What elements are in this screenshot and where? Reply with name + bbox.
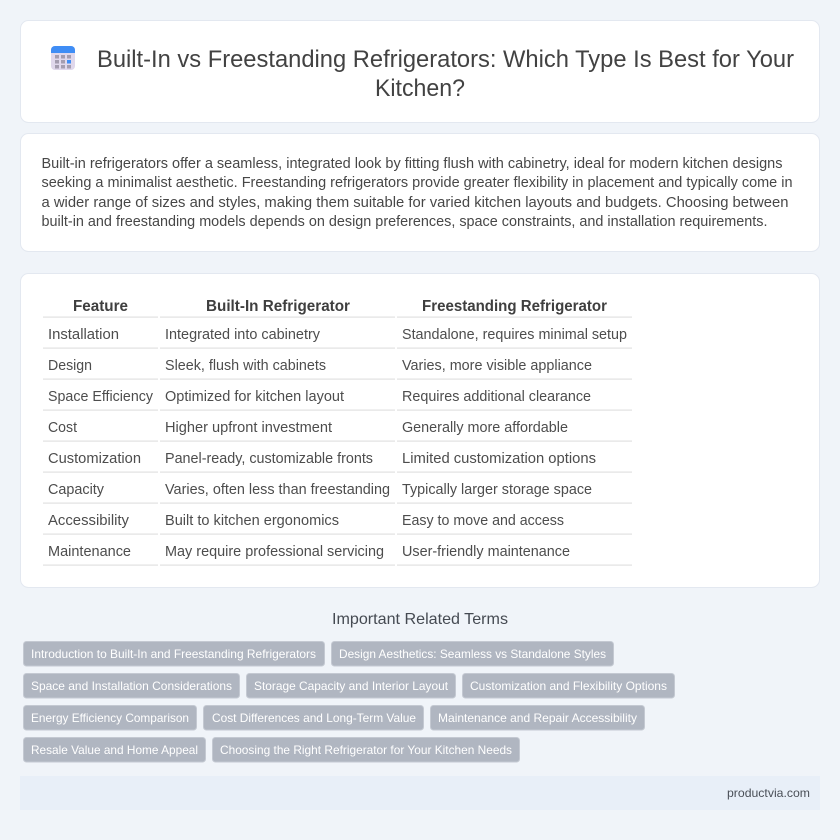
table row: Maintenance: User-friendly maintenance [402,544,570,560]
table row: Customization: Limited customization options [402,451,596,467]
panel: related term chips: Energy Efficiency Comparison [31,711,189,725]
panel: introduction text: a wider range of sizes and styles, making them suitable for varied kitchen layouts and budgets. Choosing between [42,195,788,211]
panel: related term chips: Cost Differences and Long-Term Value [212,711,416,725]
table row: Capacity: Typically larger storage space [402,482,592,498]
panel: comparison table [20,274,820,588]
table row: Cost: Higher upfront investment [165,420,332,436]
table row: Cost: Generally more affordable [402,420,568,436]
panel: related term chips: Storage Capacity and Interior Layout [254,679,449,693]
table header row [43,298,632,318]
table row: Design: Design [48,358,92,374]
icon: calendar-style grid [51,46,75,70]
table row: Capacity: Capacity [48,482,105,498]
table row: Design [43,358,632,380]
table header row: Freestanding Refrigerator [422,298,607,315]
table header row: Feature [73,298,128,315]
table row: Maintenance [43,544,632,566]
table row: Customization: Panel-ready, customizable fronts [165,451,373,467]
panel: related term chips: Introduction to Built-In and Freestanding Refrigerators [31,647,316,661]
table header row: Built-In Refrigerator [206,298,350,315]
panel: related term chips: Choosing the Right Refrigerator for Your Kitchen Needs [220,743,512,757]
table row: Customization [43,451,632,473]
panel: title header [20,20,820,122]
table row: Cost: Cost [48,420,77,436]
title: Built-In vs Freestanding Refrigerators: Which Type Is Best for Your [97,46,794,73]
table row: Design: Varies, more visible appliance [402,358,592,374]
panel: introduction text [20,134,820,252]
table row: Accessibility: Built to kitchen ergonomics [165,513,339,529]
table row: Maintenance: May require professional servicing [165,544,384,560]
table row: Installation: Installation [48,327,119,343]
table row: Space Efficiency [43,389,632,411]
table row: Customization: Customization [48,451,141,467]
panel: related term chips: Maintenance and Repair Accessibility [438,711,637,725]
table row: Capacity: Varies, often less than freestanding [165,482,390,498]
title [97,46,794,102]
table row: Accessibility: Easy to move and access [402,513,564,529]
table row: Space Efficiency: Requires additional clearance [402,389,591,405]
panel: related term chips: Space and Installation Considerations [31,679,232,693]
table row: Cost [43,420,632,442]
table row: Installation [43,327,632,349]
table row: Accessibility: Accessibility [48,513,130,529]
panel: related term chips: Design Aesthetics: Seamless vs Standalone Styles [339,647,606,661]
table row: Installation: Standalone, requires minimal setup [402,327,627,343]
panel: related term chips: Customization and Flexibility Options [470,679,667,693]
table row: Space Efficiency: Optimized for kitchen layout [165,389,344,405]
table row: Installation: Integrated into cabinetry [165,327,321,343]
heading: important related terms: Important Related Terms [332,611,508,628]
panel: related term chips: Resale Value and Home Appeal [31,743,198,757]
panel: introduction text: seeking a minimalist aesthetic. Freestanding refrigerators provide greater flexibility in placement and typically come in [42,175,792,191]
title: Kitchen? [375,75,465,102]
table row: Capacity [43,482,632,504]
footer bar [20,776,820,810]
table row: Accessibility [43,513,632,535]
table row: Maintenance: Maintenance [48,544,131,560]
panel: introduction text: built-in and freestanding models depends on design preferences, space constraints, and installation requirements. [42,214,768,230]
table row: Space Efficiency: Space Efficiency [48,389,154,405]
panel: introduction text: Built-in refrigerators offer a seamless, integrated look by fitting flush with cabinetry, ideal for modern kitchen designs [42,156,783,172]
table row: Design: Sleek, flush with cabinets [165,358,326,374]
panel: related term chips [24,642,674,762]
footer bar: productvia.com [727,786,810,800]
